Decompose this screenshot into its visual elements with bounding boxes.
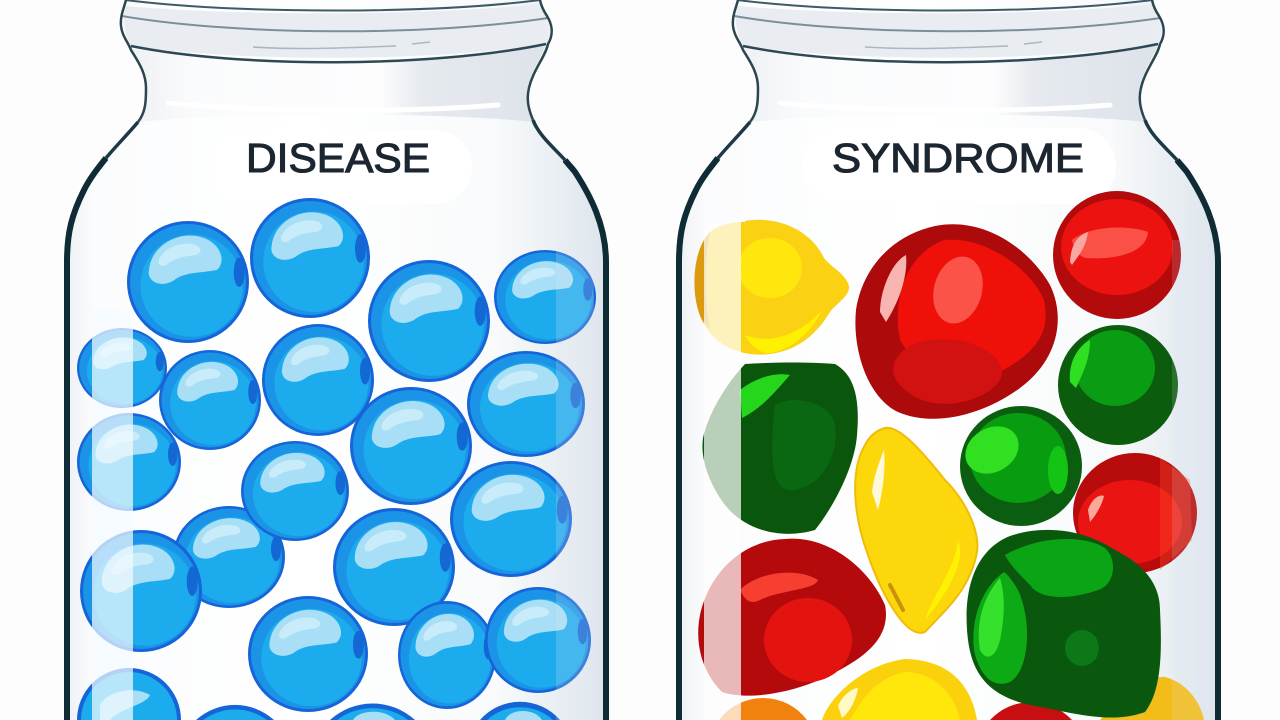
green candy right bbox=[1058, 325, 1178, 445]
amber candy bottom right bbox=[1100, 677, 1204, 720]
label: SYNDROME: SYNDROME bbox=[832, 135, 1084, 181]
glass reflection right: syndrome bbox=[1172, 240, 1206, 720]
jar: disease bbox=[67, 0, 606, 720]
blue marbles: disease bbox=[77, 198, 596, 720]
big green candy bbox=[967, 530, 1161, 718]
glass reflection left: disease bbox=[92, 310, 133, 720]
red candy bottom bbox=[990, 702, 1072, 720]
red candy top right bbox=[1053, 191, 1181, 319]
glass reflection left: syndrome bbox=[704, 222, 741, 720]
yellow candy bottom bbox=[822, 659, 977, 720]
label pill: disease bbox=[210, 130, 472, 204]
dark green candy left bbox=[702, 362, 858, 534]
label: DISEASE: DISEASE bbox=[246, 135, 430, 181]
yellow candy top left bbox=[694, 220, 849, 355]
orange candy bottom left bbox=[719, 698, 807, 720]
glass reflection right: disease bbox=[556, 240, 594, 720]
yellow diamond candy bbox=[855, 428, 977, 633]
red candy right bbox=[1073, 453, 1197, 573]
big red candy bbox=[855, 224, 1058, 419]
jar: syndrome bbox=[679, 0, 1218, 720]
red candy lower left bbox=[698, 539, 886, 696]
label pill: syndrome bbox=[802, 128, 1116, 204]
green candy centre bbox=[957, 406, 1082, 526]
